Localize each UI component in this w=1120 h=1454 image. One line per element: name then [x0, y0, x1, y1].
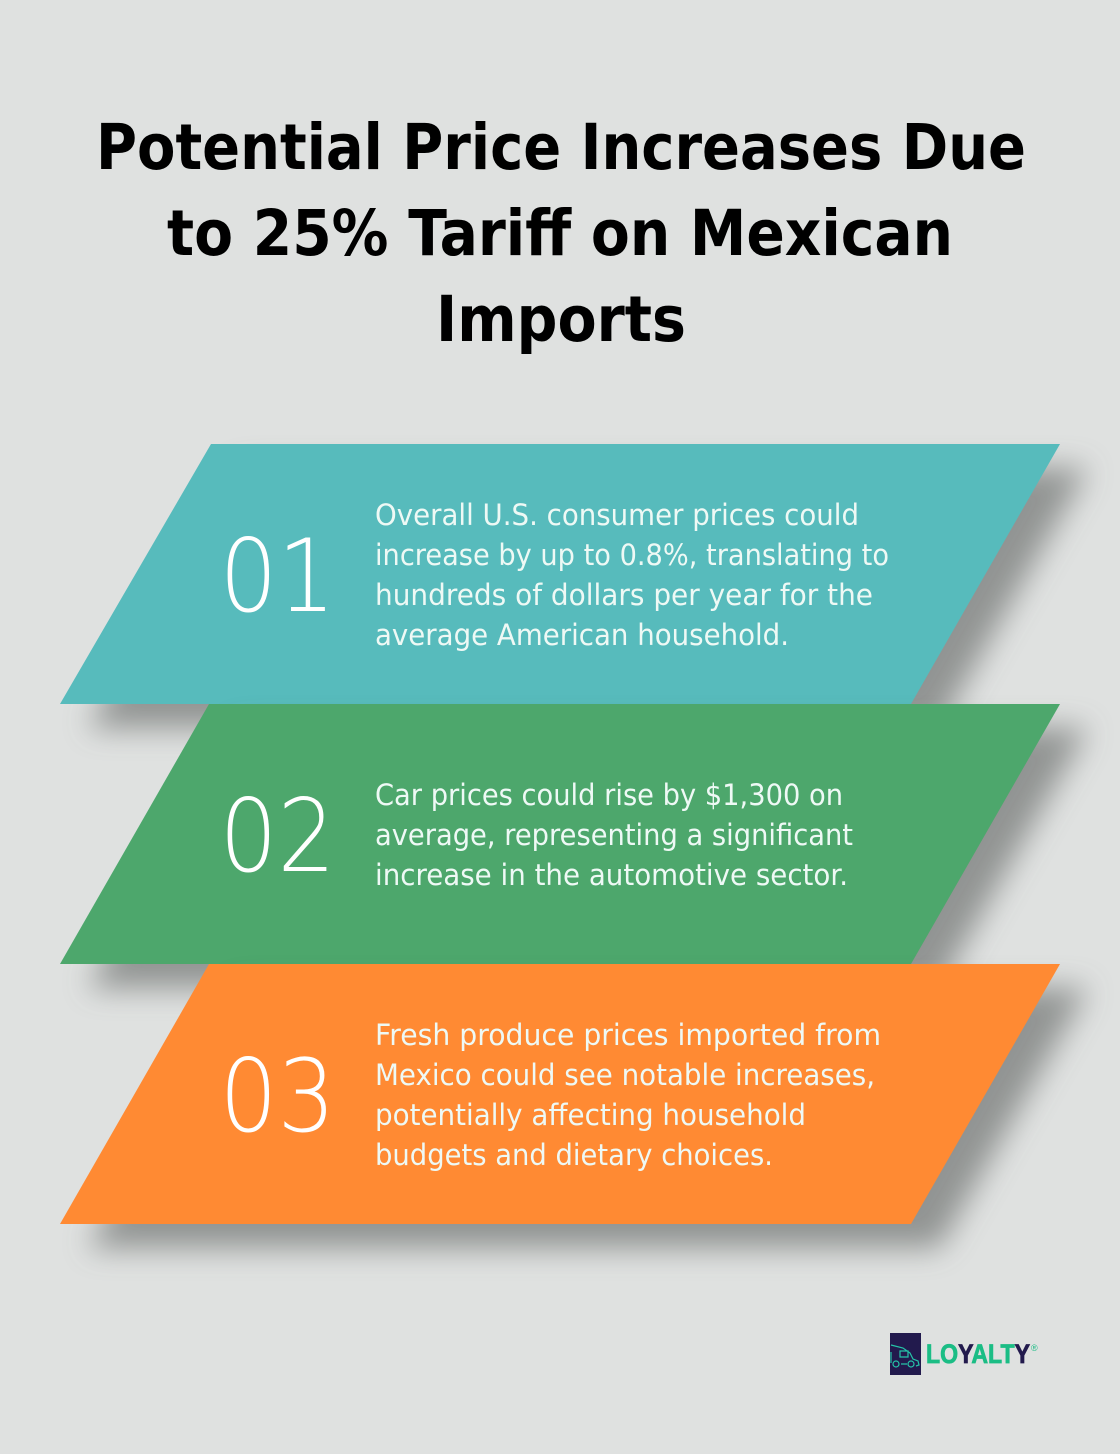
panel 02: car prices	[60, 704, 1088, 988]
title: to 25% Tariff on Mexican	[167, 197, 953, 270]
text block 01: Overall U.S. consumer prices could	[375, 498, 859, 532]
text block 02: average, representing a significant	[375, 818, 853, 852]
logo wordmark: LOYALTY	[926, 1339, 1030, 1369]
text block 03: Mexico could see notable increases,	[375, 1058, 875, 1092]
logo	[890, 1333, 1038, 1375]
title: Potential Price Increases Due	[96, 111, 1026, 184]
text block 01: increase by up to 0.8%, translating to	[375, 538, 889, 572]
icon: truck on navy square	[890, 1333, 921, 1375]
registered mark: ®	[1031, 1343, 1038, 1353]
panel 01: consumer prices	[60, 444, 1088, 728]
title	[96, 111, 1026, 356]
title: Imports	[436, 283, 686, 356]
text block 02: Car prices could rise by $1,300 on	[375, 778, 843, 812]
text block 01	[375, 498, 889, 652]
text block 03: budgets and dietary choices.	[375, 1138, 773, 1172]
panel 03: fresh produce	[60, 964, 1088, 1248]
text block 02	[375, 778, 853, 892]
text block 03: potentially affecting household	[375, 1098, 806, 1132]
text block 02: increase in the automotive sector.	[375, 858, 848, 892]
text block 01: average American household.	[375, 618, 789, 652]
text block 03	[375, 1018, 881, 1172]
text block 01: hundreds of dollars per year for the	[375, 578, 873, 612]
number 02: 02	[220, 777, 336, 895]
number 01: 01	[220, 517, 336, 635]
text block 03: Fresh produce prices imported from	[375, 1018, 881, 1052]
number 03: 03	[220, 1037, 336, 1155]
